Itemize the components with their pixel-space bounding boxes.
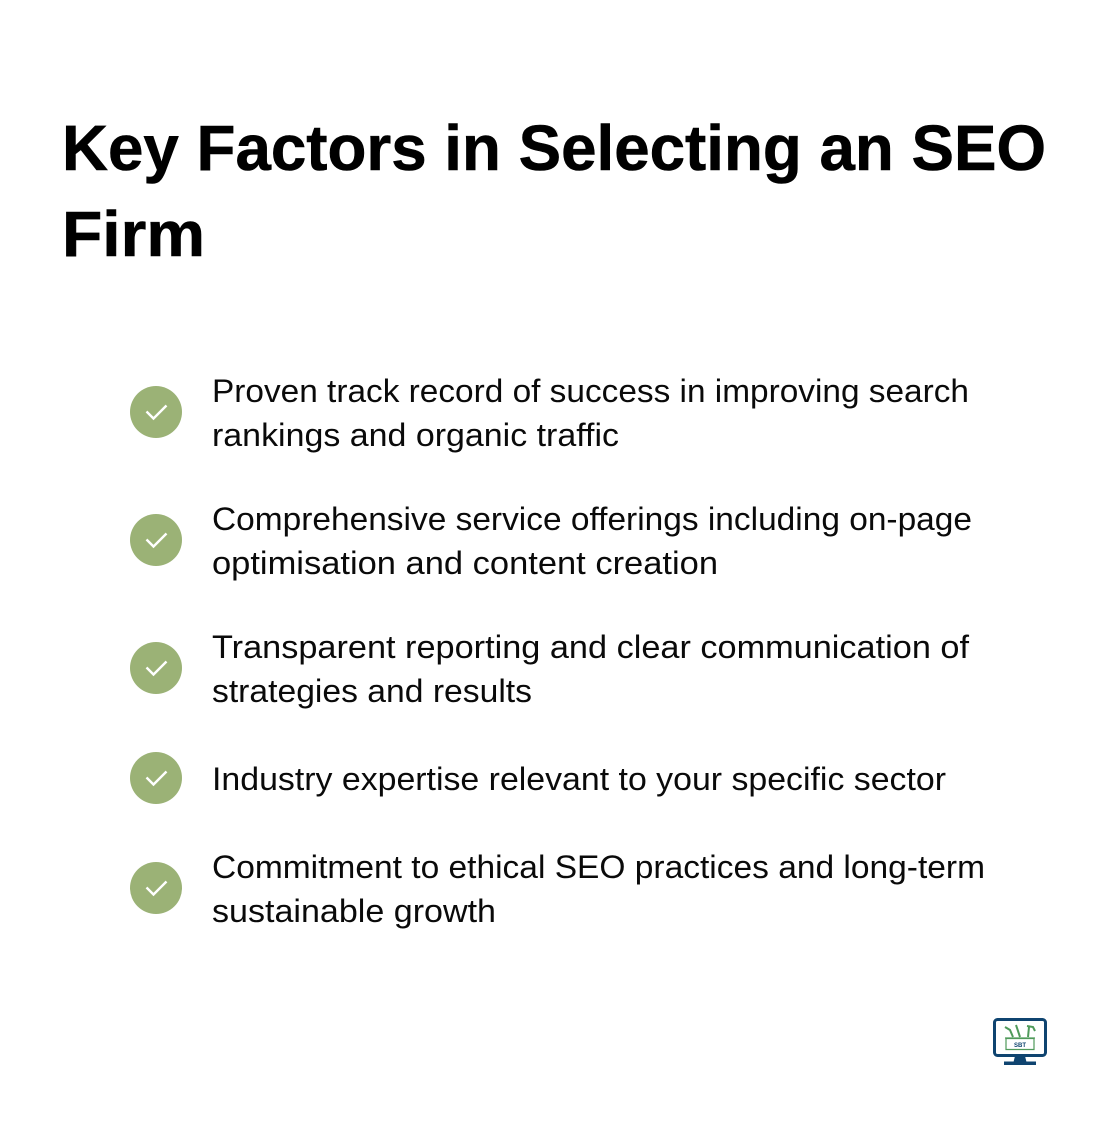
text: item 2 bbox=[212, 501, 972, 581]
title: Firm bbox=[62, 198, 205, 270]
text: item 2: Comprehensive service offerings including on-page bbox=[212, 501, 972, 537]
icon: check 1 bbox=[130, 386, 182, 438]
icon: check 3 bbox=[130, 642, 182, 694]
text: item 2: optimisation and content creation bbox=[212, 545, 718, 581]
icon: check 5 bbox=[130, 862, 182, 914]
list item 5 bbox=[130, 849, 985, 929]
icon: SBT logo monitor with toolbox bbox=[994, 1020, 1046, 1065]
text: item 3 bbox=[212, 629, 970, 709]
icon: check 4 bbox=[130, 752, 182, 804]
text: item 1: rankings and organic traffic bbox=[212, 417, 619, 453]
list item 4 bbox=[130, 752, 946, 804]
list item 1 bbox=[130, 373, 969, 453]
list item 2 bbox=[130, 501, 972, 581]
text: item 4: Industry expertise relevant to your specific sector bbox=[212, 761, 946, 797]
list item 3 bbox=[130, 629, 970, 709]
text: item 5: Commitment to ethical SEO practices and long-term bbox=[212, 849, 985, 885]
text: item 3: strategies and results bbox=[212, 673, 532, 709]
text: item 1 bbox=[212, 373, 969, 453]
title: Key Factors in Selecting an SEO bbox=[62, 112, 1046, 184]
title bbox=[62, 112, 1046, 270]
icon: SBT logo monitor with toolbox: SBT bbox=[1014, 1043, 1026, 1049]
text: item 1: Proven track record of success in improving search bbox=[212, 373, 969, 409]
text: item 5 bbox=[212, 849, 985, 929]
text: item 3: Transparent reporting and clear communication of bbox=[212, 629, 970, 665]
text: item 5: sustainable growth bbox=[212, 893, 496, 929]
icon: check 2 bbox=[130, 514, 182, 566]
